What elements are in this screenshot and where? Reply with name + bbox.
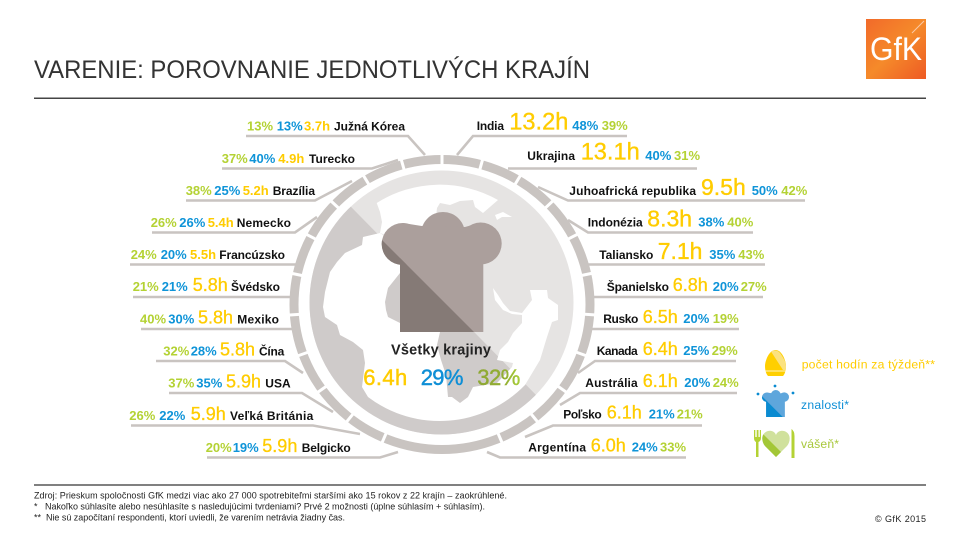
row: Veľká Británia bbox=[129, 404, 314, 424]
source and notes: Nie sú započítaní respondenti, ktorí uviedli, že varením netrávia žiadny čas. bbox=[46, 512, 345, 522]
row: Čína: 5.8h bbox=[220, 340, 255, 360]
row: Mexiko: 30% bbox=[168, 312, 195, 327]
row: Rusko: Rusko bbox=[603, 312, 638, 326]
row: Čína bbox=[163, 340, 285, 360]
row: Nemecko bbox=[151, 215, 291, 230]
chef hat bbox=[382, 212, 502, 332]
row: Rusko bbox=[603, 307, 739, 327]
row: Veľká Británia: Veľká Británia bbox=[230, 409, 314, 423]
row: Argentína: Argentína bbox=[528, 441, 586, 455]
all countries values: 29% bbox=[421, 365, 463, 390]
row: Poľsko: Poľsko bbox=[563, 408, 602, 422]
row: Brazília: Brazília bbox=[273, 184, 315, 198]
row: USA: 37% bbox=[168, 376, 195, 391]
row: Poľsko bbox=[563, 402, 703, 422]
row: Mexiko: 40% bbox=[140, 312, 166, 327]
row: Švédsko: 21% bbox=[162, 279, 188, 294]
row: USA: USA bbox=[265, 377, 291, 391]
row: Kanada bbox=[597, 339, 738, 359]
row: Ukrajina bbox=[527, 140, 700, 166]
row: Indonézia: 8.3h bbox=[647, 206, 692, 232]
row: Nemecko: Nemecko bbox=[237, 216, 291, 230]
legend: knowledge bbox=[757, 385, 849, 417]
header rule bbox=[34, 98, 926, 99]
source and notes: * bbox=[34, 502, 38, 512]
row: Švédsko: 5.8h bbox=[193, 275, 228, 295]
source and notes: Nakoľko súhlasíte alebo nesúhlasíte s nasledujúcimi tvrdeniami? Prvé 2 možnosti (úplne súhlasím + súhlasím). bbox=[45, 502, 485, 512]
row: Turecko: Turecko bbox=[309, 152, 355, 166]
row: Južná Kórea: 3.7h bbox=[304, 119, 330, 134]
row: Francúzsko: 20% bbox=[161, 247, 187, 262]
segmented ring bbox=[286, 148, 598, 450]
row: Ukrajina: 40% bbox=[645, 148, 672, 163]
row: India: 13.2h bbox=[509, 110, 568, 136]
row: Indonézia: 40% bbox=[727, 215, 754, 230]
globe bbox=[310, 170, 574, 434]
row: Brazília: 25% bbox=[214, 183, 241, 198]
row: Belgicko: 20% bbox=[206, 440, 232, 455]
row: Čína: 32% bbox=[163, 344, 190, 359]
row: Švédsko: Švédsko bbox=[231, 279, 280, 294]
row: Švédsko: 21% bbox=[133, 279, 159, 294]
row: Kanada: Kanada bbox=[597, 344, 638, 358]
legend: hours per week bbox=[765, 350, 935, 376]
row: Nemecko: 26% bbox=[151, 215, 177, 230]
row: Kanada: 25% bbox=[683, 343, 710, 358]
row: Poľsko: 21% bbox=[649, 406, 675, 422]
row: Južná Kórea: 13% bbox=[277, 119, 303, 134]
legend: passion bbox=[754, 429, 839, 458]
row: Austrália: 20% bbox=[684, 375, 711, 390]
legend: hours per week: počet hodín za týždeň** bbox=[802, 357, 935, 371]
footer rule bbox=[34, 484, 926, 486]
row: Čína: 28% bbox=[191, 344, 217, 359]
row: Ukrajina: 31% bbox=[674, 148, 700, 163]
row: Mexiko: Mexiko bbox=[237, 313, 279, 327]
row: Južná Kórea: 13% bbox=[247, 119, 273, 134]
row: Juhoafrická republika: 50% bbox=[752, 183, 778, 198]
row: Nemecko: 5.4h bbox=[208, 215, 234, 230]
row: Austrália: Austrália bbox=[585, 376, 638, 390]
row: Taliansko: 35% bbox=[709, 247, 736, 262]
row: India bbox=[477, 110, 628, 136]
row: Austrália: 6.1h bbox=[643, 371, 678, 391]
row: Francúzsko bbox=[131, 247, 285, 262]
all countries values: 6.4h bbox=[363, 365, 407, 390]
row: Španielsko: 6.8h bbox=[673, 275, 708, 295]
row: Nemecko: 26% bbox=[179, 215, 206, 230]
copyright: © GfK 2015 bbox=[875, 514, 926, 524]
legend: passion: vášeň* bbox=[801, 437, 839, 451]
leader lines bbox=[130, 136, 805, 458]
row: Belgicko bbox=[206, 436, 351, 456]
all countries values bbox=[363, 365, 520, 390]
row: Kanada: 6.4h bbox=[643, 339, 678, 359]
row: Austrália: 24% bbox=[713, 375, 739, 390]
row: Mexiko bbox=[140, 308, 279, 328]
row: Južná Kórea bbox=[247, 119, 405, 134]
row: Belgicko: Belgicko bbox=[302, 441, 351, 455]
row: Poľsko: 6.1h bbox=[607, 402, 642, 422]
row: Brazília: 38% bbox=[186, 183, 212, 198]
row: Rusko: 20% bbox=[683, 311, 710, 326]
row: Indonézia bbox=[588, 206, 754, 232]
row: Taliansko: 7.1h bbox=[658, 238, 702, 264]
row: Belgicko: 19% bbox=[233, 440, 259, 455]
row: Ukrajina: Ukrajina bbox=[527, 149, 575, 163]
row: Rusko: 6.5h bbox=[643, 307, 678, 327]
row: Turecko: 40% bbox=[249, 151, 276, 166]
row: Argentína: 24% bbox=[632, 440, 658, 455]
GfK logo bbox=[866, 19, 926, 79]
row: Argentína bbox=[528, 436, 686, 456]
row: Juhoafrická republika: Juhoafrická republika bbox=[569, 184, 696, 198]
row: USA: 35% bbox=[196, 376, 223, 391]
row: Turecko: 4.9h bbox=[278, 151, 304, 166]
row: Francúzsko: Francúzsko bbox=[219, 248, 285, 262]
row: Švédsko bbox=[133, 275, 280, 295]
row: Juhoafrická republika bbox=[569, 174, 808, 200]
row: Taliansko: Taliansko bbox=[599, 248, 653, 262]
row: Veľká Británia: 5.9h bbox=[191, 404, 226, 424]
row: Austrália bbox=[585, 371, 739, 391]
row: Francúzsko: 5.5h bbox=[190, 247, 216, 262]
row: Veľká Británia: 26% bbox=[129, 408, 156, 423]
legend: knowledge: znalosti* bbox=[801, 398, 849, 412]
row: Veľká Británia: 22% bbox=[159, 408, 186, 423]
row: Indonézia: Indonézia bbox=[588, 216, 643, 230]
row: India: 39% bbox=[602, 118, 628, 133]
all countries label: Všetky krajiny bbox=[391, 342, 491, 358]
row: USA bbox=[168, 372, 291, 392]
row: Čína: Čína bbox=[259, 344, 285, 359]
row: Indonézia: 38% bbox=[698, 215, 725, 230]
row: Poľsko: 21% bbox=[677, 406, 703, 422]
row: Ukrajina: 13.1h bbox=[581, 140, 640, 166]
row: India: 48% bbox=[572, 118, 599, 133]
row: Španielsko: 27% bbox=[741, 279, 767, 294]
source and notes: ** bbox=[34, 512, 42, 522]
row: Juhoafrická republika: 9.5h bbox=[701, 174, 746, 200]
row: Turecko: 37% bbox=[222, 151, 248, 166]
row: Taliansko bbox=[599, 238, 765, 264]
row: Južná Kórea: Južná Kórea bbox=[334, 120, 405, 134]
row: Mexiko: 5.8h bbox=[198, 308, 233, 328]
row: Rusko: 19% bbox=[713, 311, 739, 326]
title: VARENIE: POROVNANIE JEDNOTLIVÝCH KRAJÍN bbox=[34, 55, 590, 84]
row: Brazília bbox=[186, 183, 315, 198]
row: USA: 5.9h bbox=[226, 372, 261, 392]
row: Juhoafrická republika: 42% bbox=[781, 183, 808, 198]
row: Taliansko: 43% bbox=[738, 247, 765, 262]
row: Španielsko bbox=[607, 275, 767, 295]
row: Španielsko: 20% bbox=[713, 279, 739, 294]
row: Španielsko: Španielsko bbox=[607, 279, 669, 294]
source and notes: Zdroj: Prieskum spoločnosti GfK medzi viac ako 27 000 spotrebiteľmi staršími ako 15 rokov z 22 krajín – zaokrúhlené. bbox=[34, 490, 507, 500]
row: Belgicko: 5.9h bbox=[262, 436, 297, 456]
row: Argentína: 33% bbox=[660, 440, 686, 455]
row: Turecko bbox=[222, 151, 355, 166]
all countries values: 32% bbox=[477, 365, 520, 390]
row: Argentína: 6.0h bbox=[591, 436, 626, 456]
row: India: India bbox=[477, 119, 504, 133]
source and notes bbox=[34, 490, 507, 522]
GfK logo: GfK bbox=[870, 31, 922, 67]
row: Francúzsko: 24% bbox=[131, 247, 157, 262]
row: Kanada: 29% bbox=[712, 343, 738, 358]
row: Brazília: 5.2h bbox=[243, 183, 269, 198]
